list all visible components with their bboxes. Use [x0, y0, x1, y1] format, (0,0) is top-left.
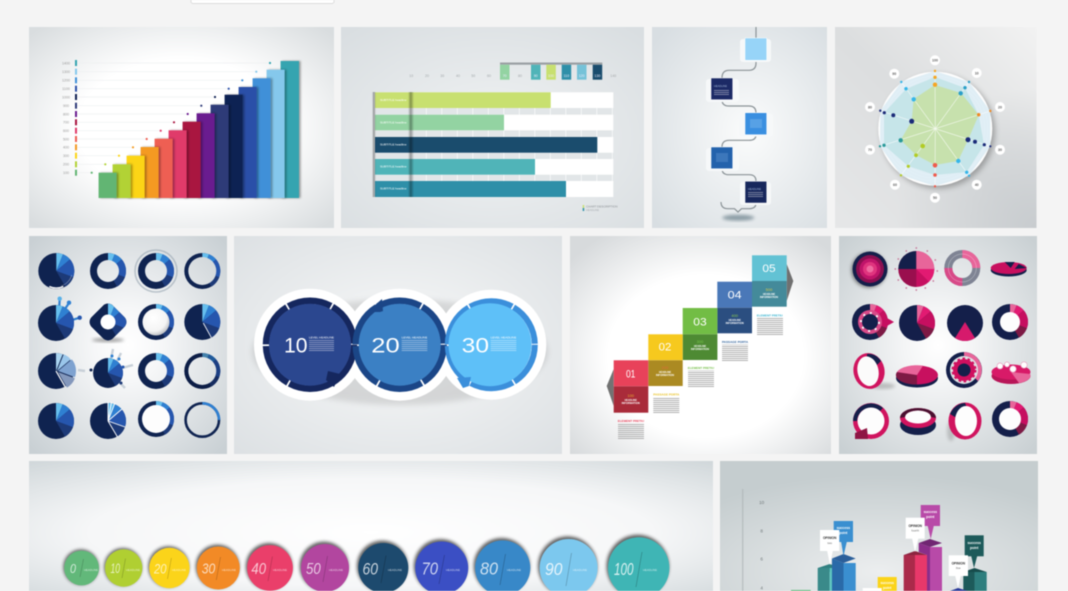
callout: opinion two — [820, 530, 839, 565]
y axis labels: 4 — [760, 585, 763, 590]
rounded diamond donut r2c2 — [88, 302, 128, 344]
callout: white partial — [863, 588, 882, 591]
pie with knobs r2c1 — [38, 296, 82, 341]
scale swatches — [500, 62, 602, 80]
step 02: INFORMATION — [656, 373, 674, 377]
callout: opinion five — [949, 555, 968, 588]
callout: opinion fourth: fourth — [911, 528, 919, 532]
thin ring r4c4 — [186, 403, 219, 437]
panel background — [341, 27, 644, 228]
right end arrow — [787, 264, 793, 301]
step 03: INFORMATION — [691, 347, 709, 351]
top button outline — [191, 0, 334, 4]
panel: stepped 3D bar chart — [29, 27, 334, 228]
exploded pie r4c2 — [90, 402, 126, 439]
row: bar 2: SUBTITLE headline — [380, 120, 407, 124]
step 03 — [683, 308, 717, 360]
step 5: HEADLINE — [748, 187, 761, 191]
column: navy — [950, 588, 968, 591]
axis labels: 1200 — [62, 79, 70, 83]
note 04: PASSAGE PORTA — [722, 340, 749, 344]
axis guide lines — [77, 63, 270, 173]
axis labels: 1400 — [62, 61, 70, 65]
circle 70: HEADLINE — [446, 568, 460, 572]
panel: pink chart collection — [839, 236, 1037, 454]
step 2: HEADLINE — [714, 84, 727, 88]
flat disc r1c4 — [991, 262, 1027, 276]
panel background — [234, 236, 562, 454]
column: purple — [919, 539, 942, 591]
donut r3c3 — [138, 353, 174, 389]
column: dark teal — [963, 568, 987, 591]
circle 80 — [474, 538, 530, 591]
step 04: 04 — [728, 289, 742, 301]
circle 40 — [246, 543, 293, 591]
circle 60: HEADLINE — [388, 568, 402, 572]
column: blue — [832, 554, 856, 591]
panel background — [839, 236, 1037, 454]
circle 60: 60 — [362, 559, 378, 578]
donut r4c4 — [992, 401, 1028, 437]
callout: opinion five: five — [956, 566, 961, 570]
circle 60 — [357, 541, 408, 591]
panel background — [652, 27, 827, 228]
callout: magenta: point — [926, 515, 935, 519]
tilted ring r3c1 — [850, 350, 895, 392]
scale swatches: 70 — [503, 74, 507, 78]
y axis labels: 6 — [760, 557, 763, 562]
circle 90: 90 — [545, 559, 563, 579]
callout: yellow: point — [883, 586, 892, 590]
step 02 — [648, 334, 683, 386]
circle 20: HEADLINE — [172, 568, 186, 572]
panel: blue pie and donut charts — [29, 236, 227, 454]
row: bar 4: SUBTITLE headline — [380, 165, 407, 169]
y axis — [742, 489, 743, 591]
scale swatches: 90 — [534, 74, 538, 78]
step 1 — [740, 38, 771, 62]
step 05: 05 — [762, 263, 776, 275]
scale labels: 140 — [610, 74, 616, 78]
step 5 — [740, 181, 771, 205]
circle 10: 10 — [284, 335, 308, 358]
callout: blue — [834, 521, 853, 556]
radar value badges: 100 — [932, 59, 938, 63]
step 02: 200 — [662, 365, 669, 370]
step 01: INFORMATION — [622, 401, 640, 405]
bottom shadow — [722, 215, 754, 221]
callout: blue: success — [837, 526, 850, 530]
radar value badges: 70 — [868, 148, 872, 152]
circle 50: HEADLINE — [329, 568, 343, 572]
thin donut r1c4 — [184, 253, 220, 289]
panel: colored percentage circles — [29, 461, 713, 591]
radar value badges: 60 — [893, 183, 897, 187]
step 02: 02 — [659, 341, 671, 353]
callout: magenta: success — [924, 510, 937, 514]
circle 100: 100 — [614, 559, 634, 579]
panel background — [835, 27, 1036, 228]
step 03: HEADLINE — [694, 345, 707, 348]
radar value badges: 50 — [933, 196, 937, 200]
circle 20: 20 — [153, 560, 167, 576]
row: bar 4 — [375, 159, 613, 175]
radar value badges: 10 — [975, 71, 979, 75]
row: bar 1 — [375, 92, 613, 108]
scale swatches: 100 — [548, 74, 554, 78]
callout: opinion fourth: OPINION — [908, 524, 923, 528]
circle 0: HEADLINE — [84, 568, 98, 572]
circle 40: 40 — [251, 561, 266, 578]
navy pie with fan r2c3 — [947, 305, 983, 341]
axis labels — [62, 61, 70, 175]
radar value badges: 20 — [998, 105, 1002, 109]
scale labels: 10 — [409, 74, 413, 78]
panel background — [29, 461, 713, 591]
arrow — [326, 371, 340, 387]
circle 70 — [414, 539, 468, 591]
circle 30: 30 — [202, 561, 216, 578]
pale pie r3c1 — [38, 353, 76, 389]
axis labels: 400 — [63, 146, 69, 150]
radar areas — [880, 71, 990, 186]
donut r2c4 — [992, 304, 1028, 340]
callout: yellow — [878, 577, 897, 591]
scale labels: 20 — [425, 74, 429, 78]
step 02: HEADLINE — [659, 371, 672, 374]
step 04: 400 — [731, 313, 739, 318]
circle 100 — [606, 535, 669, 591]
circle 20 — [356, 299, 444, 389]
donut with halo r1c3 — [135, 250, 177, 292]
panel: vertical flow timeline — [652, 27, 827, 228]
circle 80: HEADLINE — [507, 568, 521, 572]
arrow — [457, 377, 471, 388]
circle 40: HEADLINE — [273, 568, 287, 572]
step 05 — [752, 255, 787, 307]
panel: 3D column chart with callouts — [720, 461, 1038, 591]
y axis labels: 10 — [759, 500, 765, 505]
step 3 — [739, 113, 773, 136]
radar spokes — [880, 71, 990, 186]
data dots — [91, 62, 271, 174]
row: bar 3 — [375, 137, 613, 153]
step 05: INFORMATION — [760, 295, 778, 299]
circle 10: 10 — [110, 561, 120, 576]
step 01: 100 — [627, 393, 635, 398]
circle 80: 80 — [480, 559, 498, 579]
donut r1c2 — [90, 253, 126, 289]
pie r2c4 — [184, 304, 220, 340]
legend: HEADLINE — [586, 208, 599, 212]
row: bar 5: SUBTITLE headline — [380, 187, 407, 191]
legend: CHART DESCRIPTION — [586, 204, 618, 208]
radial pie r1c2 — [894, 247, 938, 291]
radar value badges: 30 — [998, 148, 1002, 152]
callout: opinion two: two — [827, 541, 832, 545]
radar value badges — [865, 55, 1005, 203]
callout: dark teal: success — [968, 541, 981, 545]
radar value badges: 40 — [975, 183, 979, 187]
circle 100: HEADLINE — [643, 568, 657, 572]
fold shadows — [372, 92, 414, 197]
circle 50: 50 — [306, 561, 321, 578]
panel background — [29, 236, 227, 454]
panel: horizontal bar chart — [341, 27, 644, 228]
radar value badges: 90 — [892, 72, 896, 76]
white discs with shadow — [252, 289, 548, 405]
arrow — [367, 299, 383, 312]
axis labels: 700 — [63, 121, 69, 125]
scale labels: 40 — [456, 74, 460, 78]
scale labels: 30 — [440, 74, 444, 78]
circle 10: LEVEL HEADLINE — [309, 336, 334, 340]
step 04: HEADLINE — [729, 319, 741, 322]
axis labels: 800 — [63, 112, 69, 116]
row: bar 3: SUBTITLE headline — [380, 143, 407, 147]
step 4 — [706, 147, 739, 171]
circle 30: LEVEL HEADLINE — [491, 336, 516, 340]
column: red — [904, 551, 927, 591]
callout: opinion two: OPINION — [823, 536, 837, 540]
scale labels: 80 — [518, 74, 522, 78]
circle 20: LEVEL HEADLINE — [402, 336, 427, 340]
callout: opinion five: OPINION — [952, 562, 966, 566]
circle 20: 20 — [371, 335, 400, 358]
axis labels: 1000 — [62, 95, 70, 99]
thick disc r3c2 — [896, 365, 938, 388]
scale labels — [409, 74, 616, 78]
y axis labels — [759, 500, 765, 590]
note 04 — [722, 340, 749, 362]
circle 10: HEADLINE — [126, 568, 140, 572]
circle 10 — [104, 548, 142, 587]
circle 50 — [300, 542, 349, 591]
circle 30 — [448, 301, 535, 388]
column: teal — [818, 564, 841, 591]
axis ticks — [75, 60, 77, 176]
circle 90 — [538, 536, 598, 591]
donut with sphere r2c3 — [138, 304, 174, 340]
panel: ascending 3D steps — [570, 236, 831, 454]
axis labels: 100 — [63, 171, 69, 175]
radar disc — [878, 72, 992, 186]
note 05: ELEMENT PRETIU — [757, 314, 783, 318]
row: bar 1: SUBTITLE headline — [380, 98, 407, 102]
scale swatches: 120 — [579, 74, 585, 78]
step 01: 01 — [626, 369, 635, 381]
axis labels: 500 — [63, 137, 69, 141]
gear donut r3c3 — [946, 352, 982, 388]
circle 90: HEADLINE — [573, 568, 587, 572]
step 04: INFORMATION — [726, 321, 744, 325]
axis labels: 600 — [63, 129, 69, 133]
pie with callouts r3c2 — [78, 349, 133, 388]
y axis labels: 8 — [760, 528, 763, 533]
pie r4c1 — [38, 403, 74, 439]
step 05: HEADLINE — [763, 293, 776, 296]
scale swatches: 110 — [564, 74, 569, 78]
axis labels: 300 — [63, 154, 69, 158]
circle 70: 70 — [422, 559, 438, 579]
callout: magenta — [921, 505, 940, 539]
note 03: ELEMENT PRETIU — [688, 366, 714, 370]
circle 10 — [266, 301, 354, 389]
radar value badges: 80 — [868, 105, 872, 109]
step 03: 300 — [697, 339, 704, 344]
connector line — [721, 27, 756, 212]
circle 20 — [148, 546, 190, 588]
axis labels: 200 — [63, 163, 69, 167]
note 05 — [757, 314, 783, 335]
circle 0 — [63, 549, 99, 585]
scale swatches: 130 — [594, 74, 600, 78]
step 04 — [717, 282, 752, 333]
stepped bars — [99, 61, 299, 198]
callout: dark teal: point — [970, 546, 979, 550]
note 01 — [618, 419, 644, 440]
panel: three linked circles — [234, 236, 562, 454]
scale labels: 60 — [487, 74, 491, 78]
row: bar 5 — [375, 181, 613, 197]
legend — [583, 204, 618, 212]
disc shadow — [881, 74, 995, 188]
callout: yellow: success — [881, 581, 894, 585]
step 01 — [614, 360, 648, 413]
column: green — [791, 590, 811, 591]
row: bar 2 — [375, 115, 613, 130]
radar dots — [879, 70, 992, 188]
panel: radar chart — [835, 27, 1036, 228]
circle 30: 30 — [462, 335, 489, 358]
note 03 — [688, 366, 714, 388]
axis labels: 1100 — [62, 87, 70, 91]
callout: blue: point — [839, 531, 848, 535]
concentric target r1c1 — [851, 252, 888, 288]
callout: dark teal — [965, 535, 984, 568]
left end arrow — [607, 369, 614, 406]
scale labels: 50 — [471, 74, 475, 78]
note 02: PASSAGE PORTA — [653, 392, 680, 396]
circle 30 — [196, 545, 240, 590]
donut with white centre r4c3 — [138, 401, 174, 437]
step 05: 500 — [766, 287, 773, 292]
circle 30: HEADLINE — [222, 568, 236, 572]
axis labels: 1300 — [62, 70, 70, 74]
ring with arrow r4c1 — [853, 403, 889, 439]
flat ring r4c2 — [900, 408, 936, 435]
note 02 — [653, 392, 680, 414]
step 01: HEADLINE — [625, 399, 637, 402]
panel background — [570, 236, 831, 454]
tilted ring r4c3 — [947, 402, 982, 441]
striped donut r1c3 — [948, 254, 976, 282]
callout: opinion fourth — [906, 518, 925, 552]
grid behind rows — [375, 100, 613, 190]
note 01: ELEMENT PRETIU — [618, 419, 644, 423]
step 03: 03 — [693, 316, 707, 328]
pie r2c2 — [899, 305, 935, 341]
step 2 — [706, 78, 739, 102]
circle 0: 0 — [70, 561, 77, 576]
panel background — [29, 27, 334, 228]
dark donut r3c4 — [184, 353, 220, 389]
axis labels: 900 — [63, 104, 69, 108]
gear pie r2c1 — [852, 304, 894, 340]
pie r1c1 — [38, 253, 74, 289]
disc with pins r3c4 — [992, 362, 1030, 384]
panel background — [720, 461, 1038, 591]
